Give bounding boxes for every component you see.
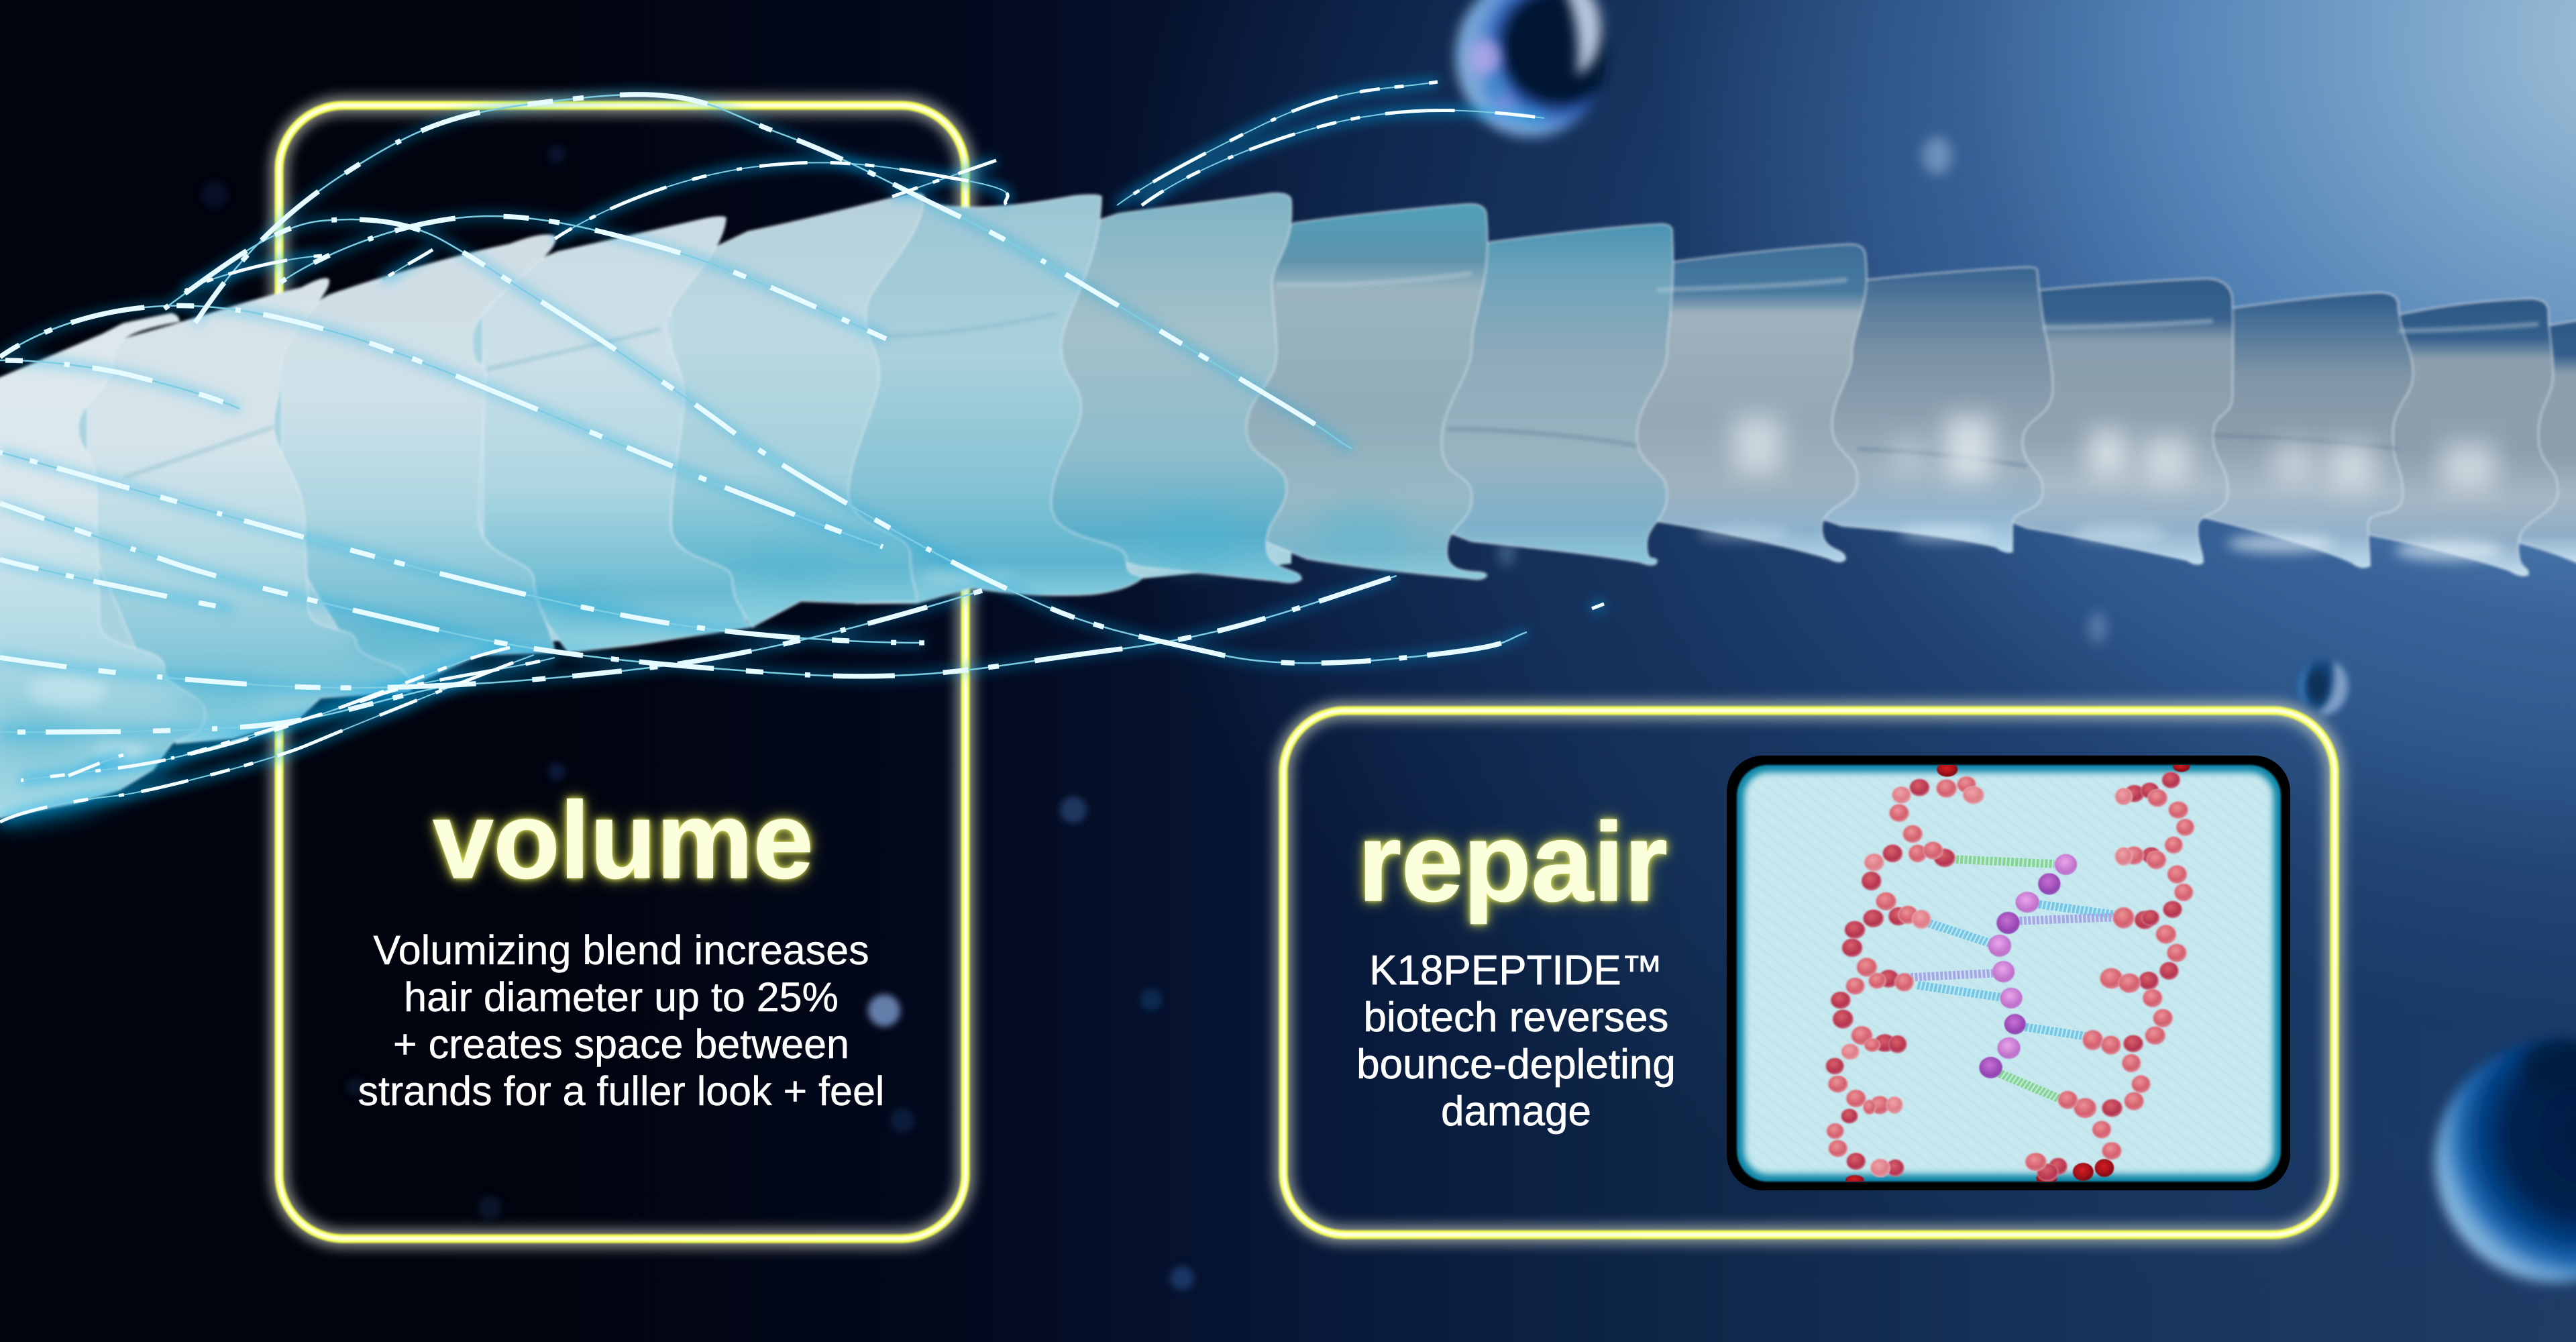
bokeh particles bbox=[201, 137, 2107, 1290]
hair ridges and highlights bbox=[0, 273, 2538, 761]
hair strands bbox=[0, 82, 1604, 822]
DNA linkers bbox=[1902, 860, 2116, 1099]
cuticle scale 3 bbox=[282, 235, 555, 691]
cuticle scale H bbox=[2127, 293, 2413, 568]
DNA beads bbox=[1826, 761, 2194, 1185]
heading: volume: volume bbox=[433, 780, 814, 901]
cuticle scale 1 bbox=[0, 313, 205, 819]
text: repair description: bounce-depleting bbox=[1356, 1041, 1676, 1088]
text: repair description: biotech reverses bbox=[1364, 994, 1668, 1041]
heading: repair: repair bbox=[1358, 801, 1668, 925]
cuticle scale 4 bbox=[483, 217, 753, 652]
cuticle scale D bbox=[1389, 224, 1673, 565]
text: repair description: K18PEPTIDE™ bbox=[1369, 947, 1663, 994]
hair glow bbox=[0, 691, 410, 817]
text: volume description: hair diameter up to 25% bbox=[404, 974, 839, 1020]
cuticle scale G bbox=[1945, 278, 2233, 564]
cuticle scale C bbox=[1221, 204, 1488, 579]
text: repair description: damage bbox=[1441, 1088, 1591, 1135]
panel: volume neon frame bbox=[279, 105, 965, 1239]
cuticle scale B bbox=[1033, 193, 1301, 582]
DNA image panel bbox=[1727, 756, 2290, 1190]
text: repair description bbox=[1356, 947, 1676, 1135]
cuticle scale A bbox=[805, 195, 1141, 603]
cuticle scale E bbox=[1570, 244, 1867, 562]
text: volume description: strands for a fuller look + feel bbox=[358, 1068, 884, 1114]
cuticle scale F bbox=[1758, 267, 2053, 552]
cuticle scale 5 bbox=[671, 193, 924, 627]
small bubble bbox=[2297, 660, 2349, 715]
cuticle scale I bbox=[2308, 299, 2558, 576]
bottom-right bubble bbox=[2435, 1040, 2576, 1282]
text: volume description: + creates space between bbox=[393, 1021, 849, 1067]
top bubble bbox=[1456, 0, 1606, 137]
cuticle scale J bbox=[2428, 321, 2576, 564]
text: volume description: Volumizing blend increases bbox=[373, 927, 869, 973]
text: volume description bbox=[358, 927, 884, 1114]
hair base silhouette bbox=[0, 228, 1291, 805]
panel: repair neon frame bbox=[1283, 711, 2334, 1235]
hair shaft bbox=[0, 193, 2576, 819]
cuticle scale 2 bbox=[87, 278, 412, 743]
